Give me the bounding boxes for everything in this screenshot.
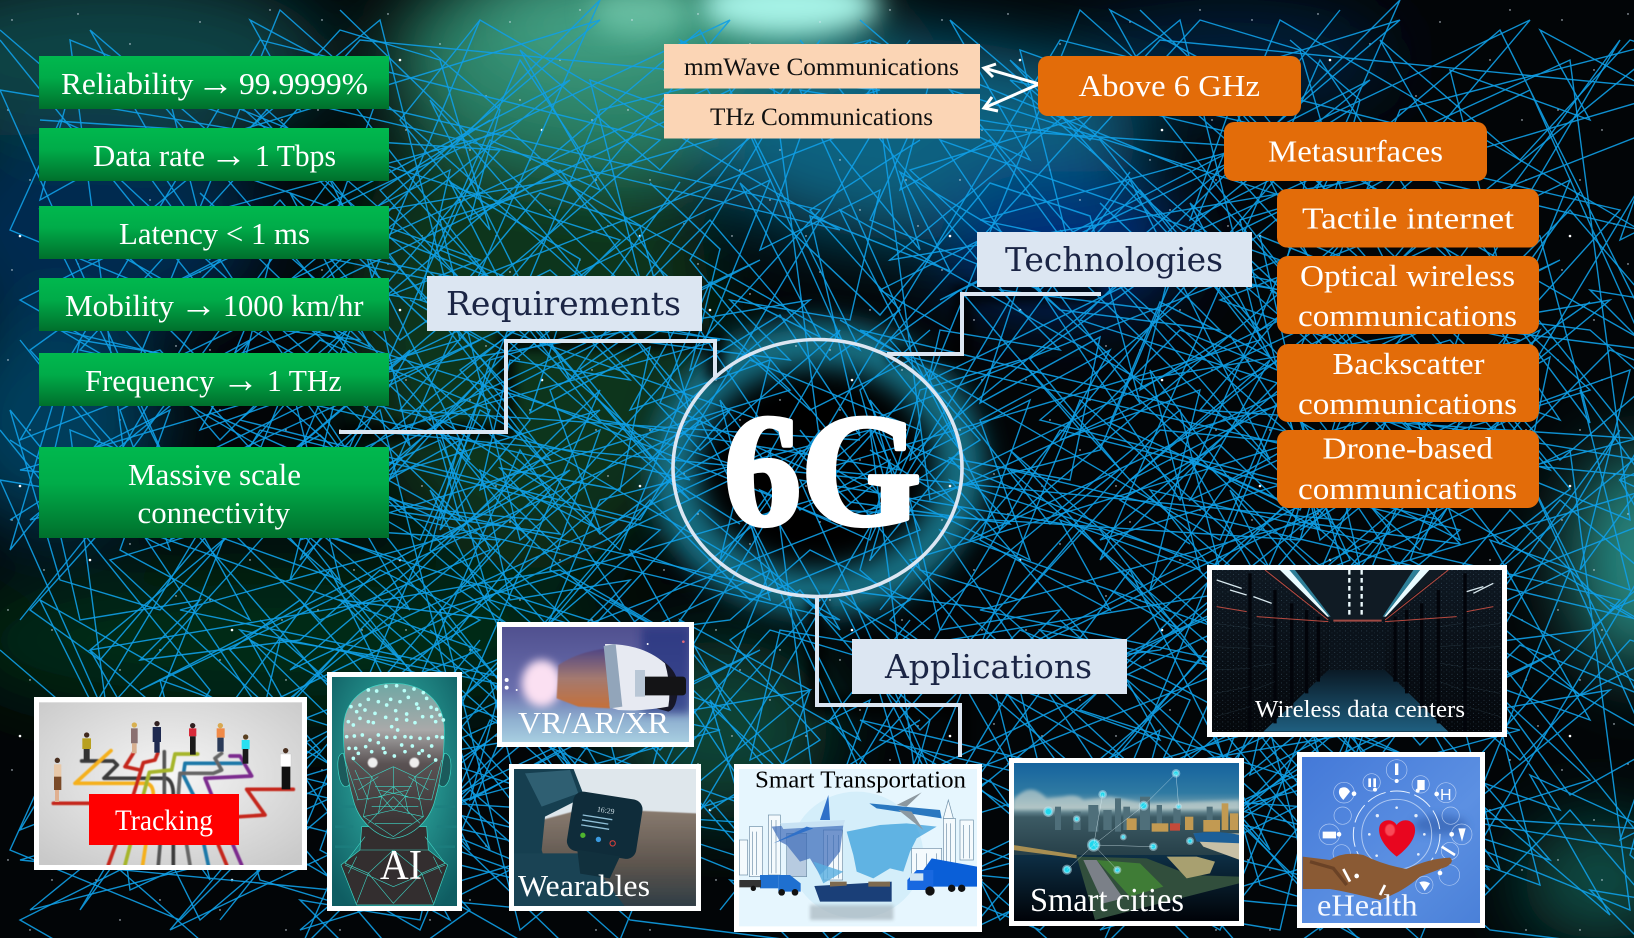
- technologies connector line: [887, 294, 1101, 354]
- technology: optical wireless communications: communications: [1298, 298, 1517, 333]
- requirement: data rate: [39, 128, 389, 181]
- heading: Technologies: Technologies: [1005, 240, 1223, 279]
- heading: Applications: [852, 639, 1127, 694]
- requirement: reliability: →: [197, 63, 234, 104]
- label: VR/AR/XR: VR/AR/XR: [518, 705, 669, 740]
- technology: backscatter communications: communications: [1298, 386, 1517, 421]
- panel: technologies list: [1038, 56, 1539, 508]
- image card: smart cities: [1009, 758, 1244, 926]
- image card: eHealth: H: [1440, 787, 1452, 804]
- image card: wearables: [509, 764, 701, 911]
- technology: drone-based communications: Drone-based: [1322, 430, 1494, 466]
- image card: eHealth: [1297, 752, 1485, 928]
- applications connector line: [817, 598, 960, 757]
- requirement: latency: Latency < 1 ms: [119, 216, 310, 251]
- requirement: data rate: 1 Tbps: [255, 138, 336, 173]
- requirement: mobility: [39, 278, 389, 331]
- requirement: reliability: 99.9999%: [239, 66, 368, 101]
- requirement: mobility: →: [180, 285, 217, 326]
- requirement: data rate: Data rate: [93, 138, 205, 173]
- box: THz communications: [664, 94, 980, 138]
- requirement: frequency: 1 THz: [267, 363, 342, 398]
- label: Smart cities: Smart cities: [1030, 882, 1184, 919]
- technology: above 6 GHz: [1038, 56, 1301, 116]
- label: Smart Transportation: Smart Transportation: [755, 768, 966, 794]
- arrows from Above 6 GHz: [984, 64, 1039, 111]
- requirement: massive connectivity: Massive scale: [128, 457, 301, 492]
- label: Wireless data centers: Wireless data centers: [1255, 697, 1465, 723]
- requirement: massive connectivity: connectivity: [138, 495, 290, 530]
- image card: tracking: [34, 697, 307, 870]
- heading: Applications: Applications: [884, 647, 1092, 686]
- technology: optical wireless communications: [1277, 256, 1539, 334]
- requirement: mobility: 1000 km/hr: [223, 288, 364, 323]
- box: mmWave communications: mmWave Communications: [684, 54, 959, 81]
- image card: VR/AR/XR: [497, 622, 694, 747]
- image card: wireless data centers: [1207, 565, 1507, 737]
- technology: above 6 GHz: Above 6 GHz: [1078, 68, 1260, 103]
- image card: AI: [327, 672, 462, 911]
- requirement: reliability: Reliability: [61, 66, 194, 101]
- requirement: reliability: [39, 56, 389, 109]
- requirement: frequency: Frequency: [85, 363, 215, 398]
- requirement: frequency: →: [222, 360, 259, 401]
- label box: Tracking: [89, 794, 239, 845]
- requirement: mobility: Mobility: [65, 288, 175, 323]
- heading: Requirements: Requirements: [446, 284, 681, 323]
- central 6G circle: [673, 340, 962, 596]
- image card: wearables: 16:29: [596, 805, 615, 816]
- box: THz communications: THz Communications: [710, 104, 933, 131]
- technology: backscatter communications: [1277, 344, 1539, 422]
- requirement: latency: [39, 206, 389, 259]
- image card: smart transportation: [734, 764, 982, 932]
- heading: Requirements: [427, 276, 702, 331]
- technology: tactile internet: Tactile internet: [1302, 200, 1514, 236]
- technology: optical wireless communications: Optical wireless: [1300, 258, 1515, 293]
- requirement: massive connectivity: [39, 447, 389, 538]
- panel: requirements list: [39, 56, 389, 538]
- requirement: data rate: →: [210, 135, 247, 176]
- label: Wearables: Wearables: [518, 868, 650, 903]
- heading: Technologies: [977, 232, 1252, 287]
- label: AI: AI: [380, 843, 422, 889]
- technology: drone-based communications: communications: [1298, 471, 1517, 506]
- requirements connector line: [339, 341, 715, 432]
- technology: drone-based communications: [1277, 430, 1539, 508]
- technology: metasurfaces: Metasurfaces: [1268, 134, 1443, 168]
- label box: Tracking: Tracking: [115, 804, 213, 837]
- requirement: frequency: [39, 353, 389, 406]
- central 6G circle: 6G: [724, 381, 921, 559]
- box: mmWave communications: [664, 44, 980, 88]
- technology: tactile internet: [1277, 189, 1539, 248]
- technology: backscatter communications: Backscatter: [1332, 346, 1485, 381]
- label: eHealth: eHealth: [1317, 888, 1418, 922]
- technology: metasurfaces: [1224, 122, 1487, 181]
